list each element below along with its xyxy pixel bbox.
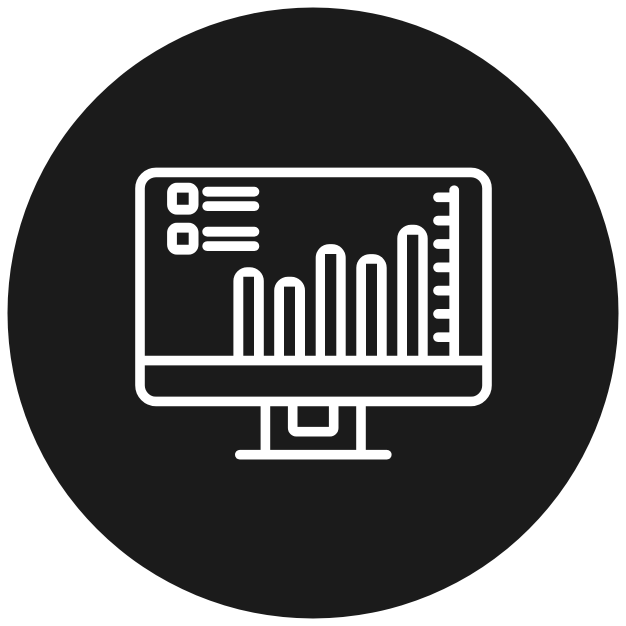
bar 1	[233, 267, 264, 357]
list lines 1	[207, 192, 254, 206]
stand base	[240, 450, 387, 460]
checkbox 1	[172, 188, 194, 210]
checkbox 2	[172, 228, 194, 250]
tick marks	[438, 197, 452, 337]
icon: monitor	[140, 172, 487, 455]
monitor frame	[140, 172, 487, 401]
bar 4	[356, 254, 387, 357]
stand neck bracket	[293, 401, 334, 432]
bar 2	[274, 277, 305, 357]
bar 5	[397, 225, 428, 357]
vertical axis	[449, 190, 459, 358]
bar 3	[316, 244, 346, 357]
bar chart	[233, 225, 428, 357]
screen divider	[140, 356, 487, 365]
list: legend items	[172, 188, 254, 250]
list lines 2	[207, 232, 254, 246]
axis ruler	[438, 190, 454, 358]
stand legs	[265, 401, 361, 455]
